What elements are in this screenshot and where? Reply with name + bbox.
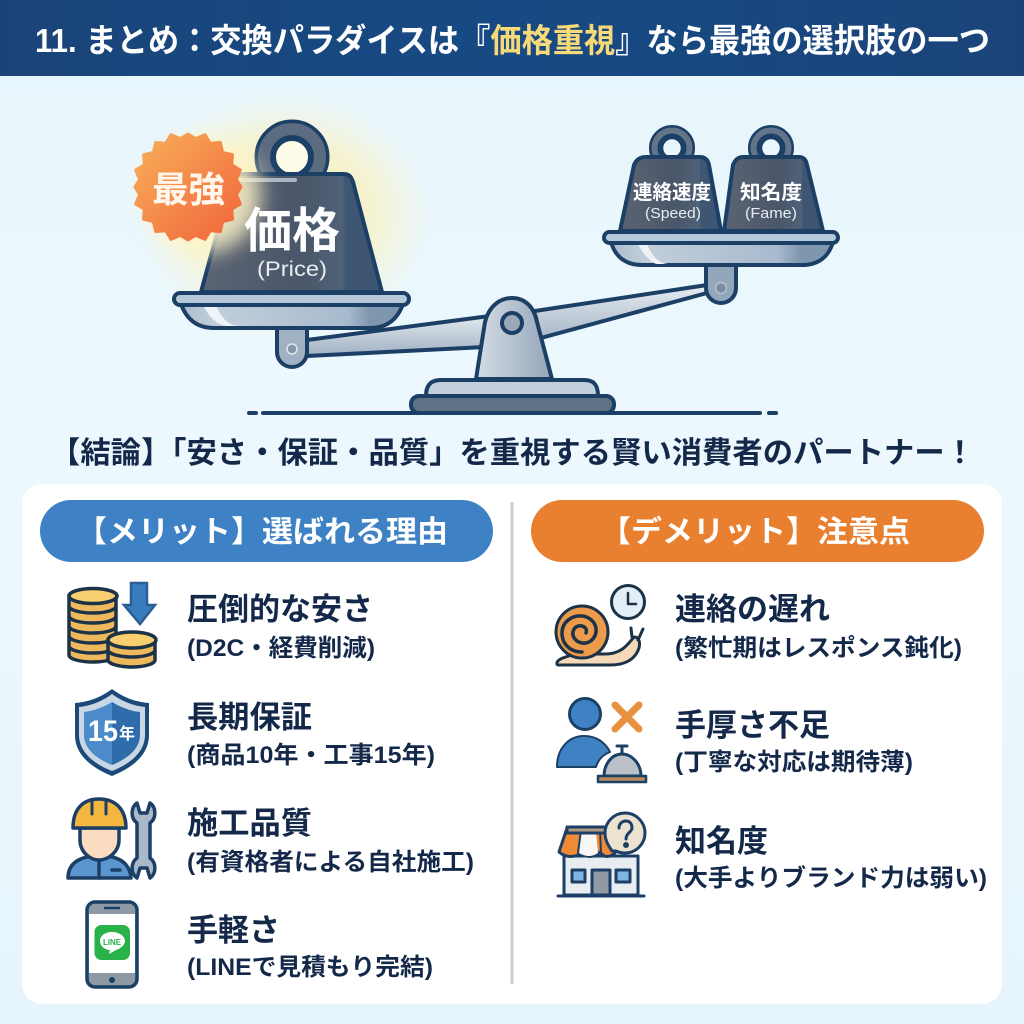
demerit 1 detail: (繁忙期はレスポンス鈍化) — [675, 635, 962, 662]
demerit 3 title: 知名度 — [675, 824, 768, 859]
icon: phone with LINE app: LINE — [103, 937, 121, 947]
demerit heading pill — [531, 500, 984, 562]
merit 1: price — [69, 583, 375, 667]
strongest glow — [145, 137, 261, 253]
scale left beam arm — [307, 314, 505, 356]
price weight — [145, 129, 382, 292]
demerit 1: slow response — [556, 586, 962, 665]
icon: coins with down arrow — [69, 583, 156, 667]
price weight label: 価格 — [244, 205, 340, 258]
merit heading pill — [40, 500, 493, 562]
speed weight: (Speed) — [645, 205, 701, 222]
merit heading pill: 【メリット】選ばれる理由 — [76, 516, 448, 549]
left bracket — [277, 326, 307, 367]
merit 3: workmanship — [68, 799, 474, 878]
comparison panel — [22, 484, 1002, 1004]
scale right beam arm — [515, 285, 707, 345]
badge: 最強 — [135, 134, 241, 240]
fame weight: (Fame) — [745, 205, 797, 222]
scale lower base — [411, 396, 614, 413]
icon: 15 year shield: 15 — [88, 715, 118, 748]
icon: 15 year shield — [75, 689, 149, 776]
icon: phone with LINE app — [87, 902, 137, 987]
price weight sublabel: (Price) — [257, 258, 327, 281]
merit 4 detail: (LINEで見積もり完結) — [187, 954, 433, 981]
demerit 3: recognition — [558, 813, 987, 896]
glow behind price weight — [135, 90, 435, 340]
merit 1 detail: (D2C・経費削減) — [187, 635, 375, 662]
scale upper base — [426, 380, 598, 396]
fame weight — [724, 130, 823, 231]
merit 2 detail: (商品10年・工事15年) — [187, 742, 435, 769]
demerit heading pill: 【デメリット】注意点 — [600, 515, 910, 549]
icon: worker with wrench — [68, 799, 155, 878]
conclusion text: 【結論】「安さ・保証・品質」を重視する賢い消費者のパートナー！ — [50, 437, 975, 470]
scale ground line — [249, 411, 776, 415]
merit 4 title: 手軽さ — [187, 913, 280, 948]
speed weight: 連絡速度 — [633, 180, 711, 204]
merit 2: warranty — [75, 689, 435, 776]
speed weight — [620, 130, 721, 231]
left pan — [174, 293, 409, 328]
right bracket — [706, 262, 736, 303]
merit 3 detail: (有資格者による自社施工) — [187, 849, 474, 876]
title banner — [0, 0, 1024, 76]
merit 4: ease — [87, 902, 433, 987]
right pan — [604, 232, 838, 265]
badge: 最強: 最強 — [152, 169, 225, 210]
icon: person, cross and service bell — [557, 698, 646, 782]
demerit 1 title: 連絡の遅れ — [675, 592, 830, 627]
fame weight: 知名度 — [740, 181, 802, 204]
balance scale illustration — [135, 90, 838, 413]
merit 2 title: 長期保証 — [187, 700, 312, 735]
title banner: 11. まとめ：交換パラダイスは『価格重視』なら最強の選択肢の一つ — [35, 22, 990, 59]
icon: snail and clock — [556, 586, 644, 665]
scale pivot pin — [502, 313, 522, 333]
icon: 15 year shield: 年 — [119, 724, 135, 743]
demerit 2 detail: (丁寧な対応は期待薄) — [675, 749, 913, 776]
demerit 2: thin service — [557, 698, 913, 782]
scale central post — [476, 298, 552, 379]
icon: shop with question bubble — [558, 813, 645, 896]
demerit 2 title: 手厚さ不足 — [675, 708, 830, 743]
merit 3 title: 施工品質 — [187, 806, 312, 841]
merit 1 title: 圧倒的な安さ — [187, 592, 373, 627]
demerit 3 detail: (大手よりブランド力は弱い) — [675, 864, 987, 892]
